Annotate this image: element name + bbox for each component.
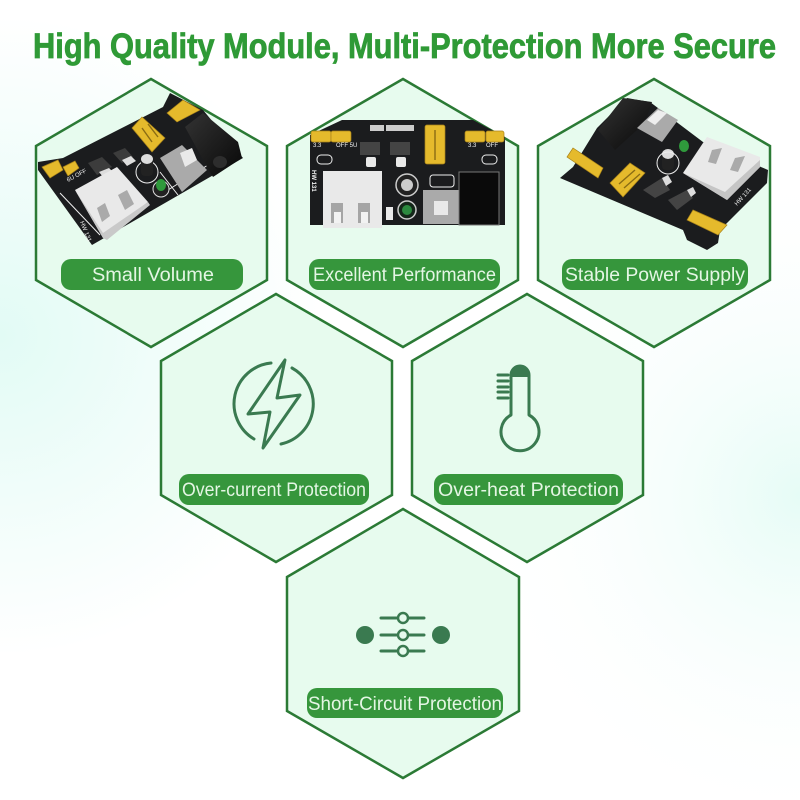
label pill: Excellent Performance xyxy=(313,265,496,286)
label pill xyxy=(434,474,623,505)
hexagon outline xyxy=(412,294,643,562)
label pill: Small Volume xyxy=(92,265,214,286)
image: power module top view: OFF xyxy=(486,143,498,149)
panel: short-circuit protection xyxy=(287,509,519,778)
image: power module angled xyxy=(38,93,243,245)
panel: excellent performance xyxy=(287,79,518,347)
image: power module top view xyxy=(310,120,505,228)
panel: over-current protection xyxy=(161,294,392,562)
image: power module angled: 6U OFF xyxy=(66,168,88,184)
hexagon outline xyxy=(287,79,518,347)
image: power module rear angle xyxy=(560,98,768,250)
hexagon outline xyxy=(161,294,392,562)
panel: small volume xyxy=(36,79,267,347)
icon: switches between two terminals xyxy=(356,613,450,656)
icon: thermometer xyxy=(498,365,539,451)
hexagon outline xyxy=(287,509,519,778)
image: power module rear angle: HW 131 xyxy=(734,187,753,207)
label pill: Stable Power Supply xyxy=(565,265,746,286)
panel: over-heat protection xyxy=(412,294,643,562)
label pill: Over-heat Protection xyxy=(438,480,619,501)
hexagon outline xyxy=(36,79,267,347)
label pill xyxy=(179,474,369,505)
icon: lightning bolt in circle xyxy=(234,360,313,448)
label pill xyxy=(562,259,748,290)
image: power module top view: 3.3 xyxy=(313,143,322,149)
image: power module angled: HW 131 xyxy=(78,221,92,243)
label pill: Over-current Protection xyxy=(182,480,366,501)
hexagon outline xyxy=(538,79,770,347)
image: power module top view: HW 131 xyxy=(310,170,316,192)
panel: stable power supply xyxy=(538,79,770,347)
image: power module top view: OFF 5U xyxy=(336,143,357,149)
label pill xyxy=(309,259,500,290)
label pill xyxy=(61,259,243,290)
image: power module top view: 3.3 xyxy=(468,143,477,149)
label pill xyxy=(307,688,503,718)
label pill: Short-Circuit Protection xyxy=(308,694,502,715)
